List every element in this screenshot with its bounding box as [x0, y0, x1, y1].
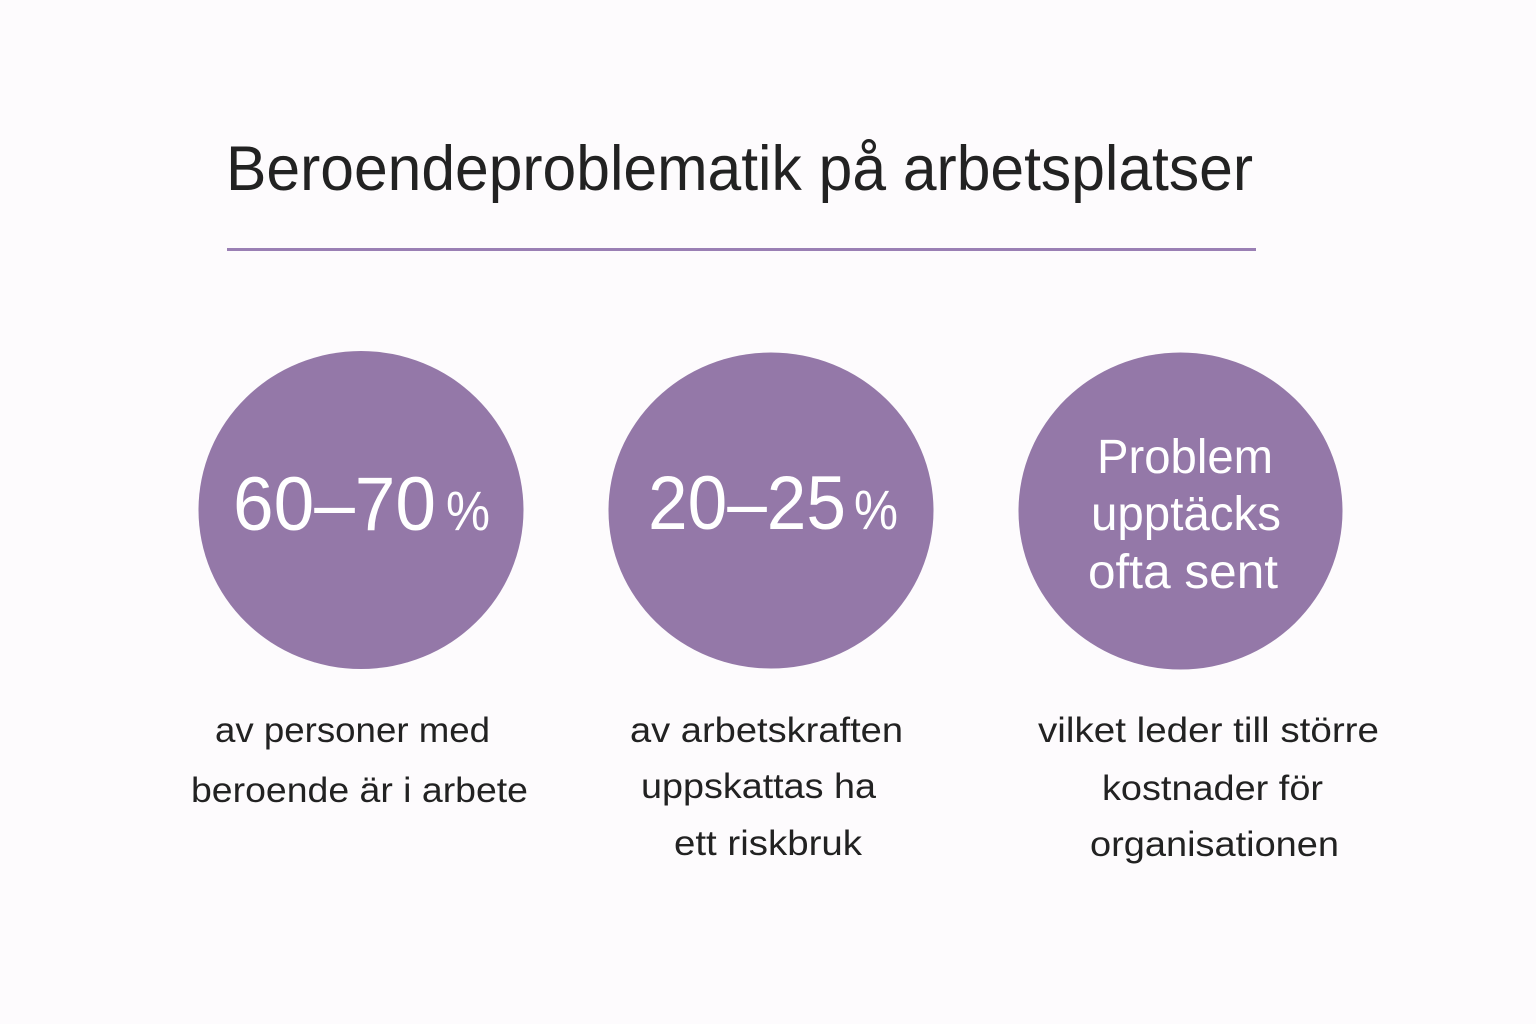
title: Beroendeproblematik på arbetsplatser: [226, 134, 1253, 204]
panel: problem upptäcks sent: [1018, 352, 1379, 864]
caption 2: uppskattas ha: [641, 767, 877, 806]
circle 2: [608, 352, 934, 668]
caption 3: vilket leder till större: [1038, 711, 1379, 750]
stat 20–25 %: %: [854, 478, 898, 541]
caption 2: av arbetskraften: [630, 711, 903, 750]
caption 1: [191, 711, 528, 810]
caption 3: organisationen: [1090, 825, 1339, 864]
stat 60–70 %: %: [446, 479, 490, 542]
caption 3: [1038, 711, 1379, 864]
circle 1: [198, 351, 524, 669]
caption 2: [630, 711, 903, 863]
stat 60–70 %: 60–70: [233, 462, 436, 547]
caption 1: beroende är i arbete: [191, 771, 528, 810]
panel: 60–70 %: [191, 351, 528, 810]
circle 3: [1018, 352, 1342, 670]
panel: 20–25 %: [608, 352, 934, 863]
caption 2: ett riskbruk: [674, 824, 863, 863]
stat 20–25 %: 20–25: [648, 461, 846, 546]
caption 3: kostnader för: [1102, 769, 1323, 808]
circle text: [1088, 431, 1281, 599]
circle text: upptäcks: [1091, 488, 1281, 541]
circle text: ofta sent: [1088, 546, 1278, 599]
caption 1: av personer med: [215, 711, 490, 750]
circle text: Problem: [1097, 431, 1273, 484]
